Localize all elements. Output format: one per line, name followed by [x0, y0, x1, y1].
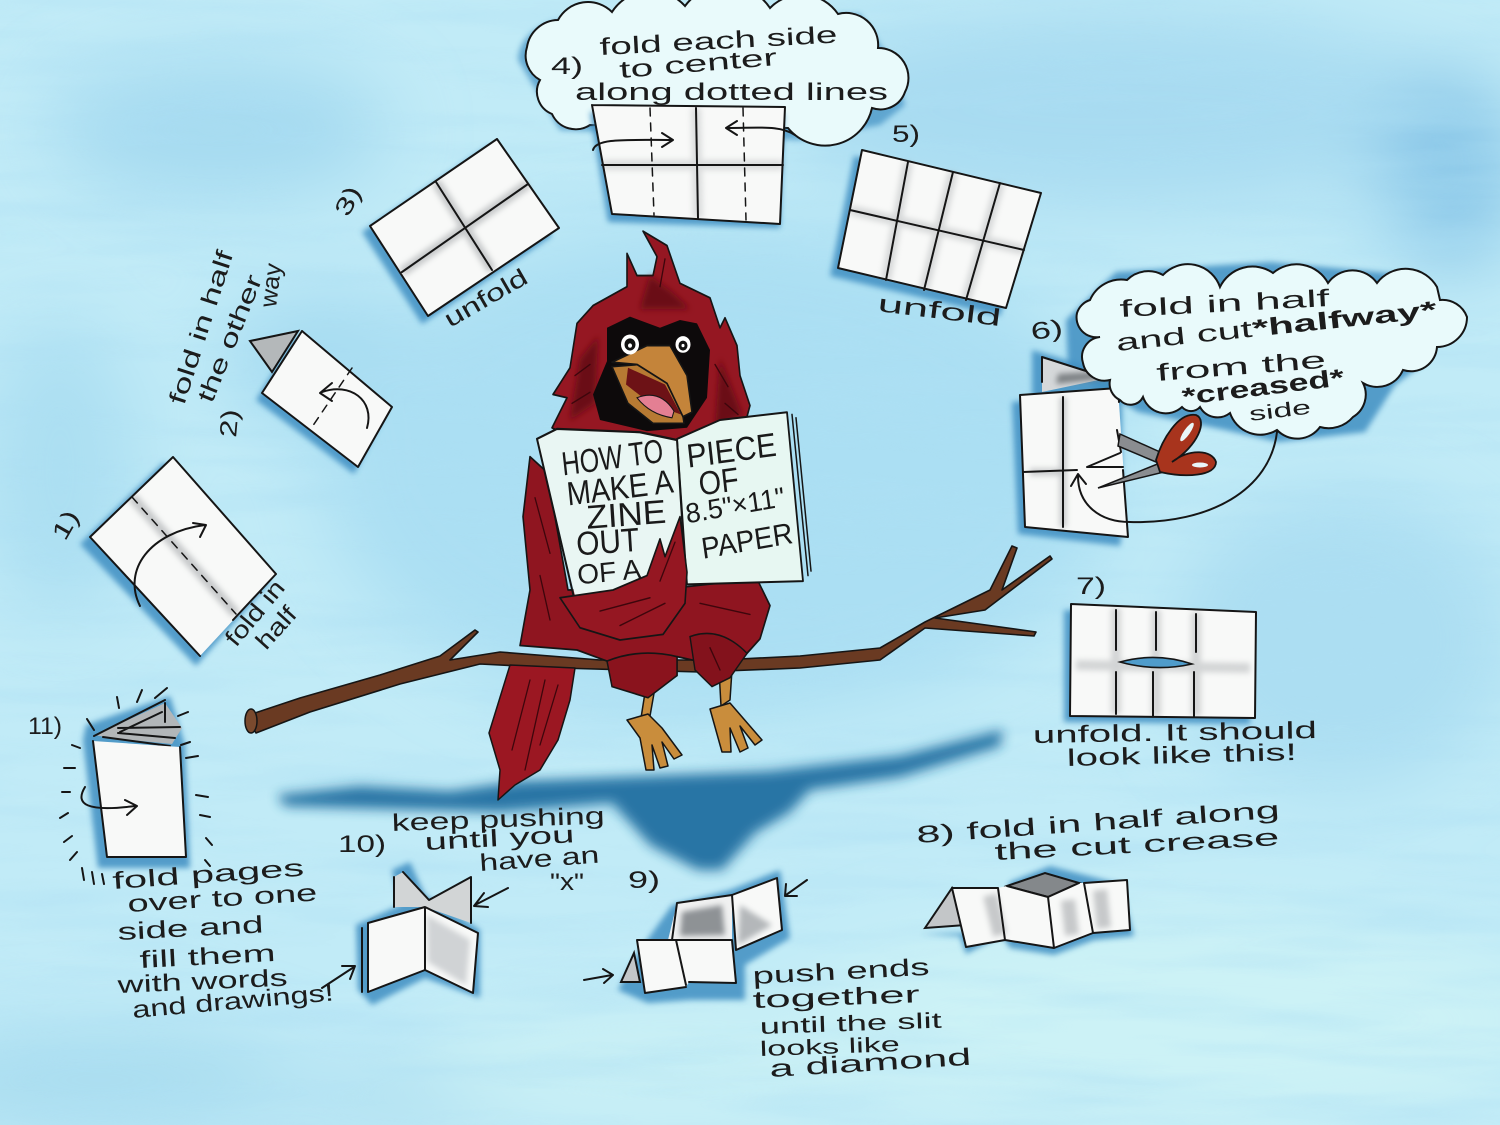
caption: fold each side to center: fold each side	[599, 22, 838, 61]
book text: ZINE	[585, 492, 667, 536]
number 6: 6)	[1029, 315, 1065, 346]
paper 10	[368, 907, 478, 993]
caption: fold each side to center: to center	[618, 44, 778, 84]
right page	[677, 412, 803, 584]
cloud 6	[1077, 264, 1467, 439]
caption: fold each side to center	[575, 22, 888, 106]
arrow: cut location	[1071, 432, 1277, 522]
diamond opening	[1007, 873, 1079, 897]
cloud 4	[526, 0, 908, 146]
left page	[537, 429, 686, 600]
front wing holding book	[560, 517, 687, 640]
number 5: 5)	[892, 121, 920, 148]
slit	[1120, 657, 1192, 668]
motion ticks	[60, 688, 212, 884]
caption: fold pages over to one side and fill them with words and drawings: side and	[117, 911, 264, 946]
caption: fold in half and cut halfway from the creased side: and cut *halfway*	[1115, 296, 1439, 357]
step 10: keep pushing until you have an x	[322, 803, 605, 1005]
step 3: unfold	[329, 139, 559, 333]
step 5: unfold	[830, 121, 1041, 332]
step 11: fold pages and fill them	[28, 688, 335, 1024]
caption: fold pages over to one side and fill them with words and drawings: with words	[116, 965, 288, 999]
book text: OF A	[576, 553, 643, 591]
paper 2	[262, 331, 392, 467]
back panels	[668, 895, 732, 940]
caption: 8) fold in half along the cut crease	[916, 797, 1281, 866]
paper 6	[1020, 388, 1128, 537]
cardinal mascot	[489, 231, 811, 800]
caption: fold in half the other way	[164, 247, 287, 408]
caption: fold pages over to one side and fill them with words and drawings	[112, 855, 335, 1024]
paper 3	[370, 139, 559, 316]
number 10: 10)	[338, 831, 386, 858]
caption: 8) fold in half along the cut crease: 8) fold in half along	[916, 797, 1281, 849]
caption: fold in half and cut halfway from the creased side: side	[1248, 397, 1312, 426]
caption: fold pages over to one side and fill them with words and drawings: and drawings!	[131, 979, 335, 1024]
feather detail strokes	[535, 259, 750, 670]
number 4: 4)	[551, 53, 583, 80]
caption: fold in half: fold in	[220, 575, 291, 652]
caption: fold in half and cut halfway from the creased side: *creased*	[1180, 364, 1346, 411]
caption: push ends together until the slit looks like a diamond: together	[752, 981, 920, 1014]
body	[520, 457, 770, 690]
step 9: push ends together	[584, 867, 972, 1083]
caption: push ends together until the slit looks like a diamond: a diamond	[769, 1044, 972, 1083]
caption: fold pages over to one side and fill them with words and drawings: fold pages	[112, 855, 305, 895]
caption: keep pushing until you have an x: "x"	[550, 869, 584, 896]
thigh	[607, 653, 677, 698]
book text: MAKE A	[565, 462, 676, 513]
tail feathers	[489, 665, 575, 800]
paper 2 flap	[250, 331, 298, 372]
book text: PAPER	[699, 517, 795, 566]
book text: HOW TO	[560, 431, 665, 483]
icon: scissors	[1098, 415, 1216, 488]
step 7: unfold, slit shown	[1033, 573, 1317, 772]
paper 8	[952, 880, 1130, 948]
caption: unfold, it should look like this: look like this!	[1066, 739, 1297, 772]
paper 1	[90, 457, 276, 656]
paper 11	[93, 741, 186, 857]
x top panels	[394, 872, 471, 923]
mouth	[612, 364, 684, 423]
caption: keep pushing until you have an x	[391, 803, 605, 896]
paper 8 side flap	[925, 888, 966, 928]
black face mask	[593, 317, 710, 431]
arrows: push ends	[584, 880, 807, 983]
arrow: fold up	[320, 383, 369, 428]
paper 5	[838, 150, 1041, 308]
caption: fold in half the other way: fold in half	[164, 247, 239, 408]
step 6: cloud, scissors, paper	[1012, 262, 1467, 546]
caption: unfold: unfold	[440, 264, 533, 333]
book text: PIECE	[685, 425, 778, 475]
arrow: turn pages	[81, 787, 137, 815]
caption: fold each side to center: along dotted lines	[575, 79, 888, 106]
book text: 8.5"×11"	[683, 481, 787, 530]
arrows: fold to center	[593, 121, 795, 150]
head	[552, 231, 750, 442]
caption: fold in half the other way: way	[255, 262, 287, 310]
caption: fold pages over to one side and fill them with words and drawings: over to one	[127, 879, 318, 918]
tongue	[637, 395, 674, 418]
caption: unfold, it should look like this	[1033, 717, 1317, 772]
caption: fold in half	[220, 575, 303, 655]
caption: unfold, it should look like this: unfold. It should	[1033, 717, 1317, 749]
arrow: fold over	[135, 523, 206, 606]
book text	[560, 425, 795, 591]
book text: OF	[697, 460, 741, 503]
number 2: 2)	[215, 408, 244, 439]
caption: 8) fold in half along the cut crease: the cut crease	[994, 824, 1280, 866]
caption: push ends together until the slit looks like a diamond: push ends	[752, 954, 930, 990]
caption: fold in half the other way: the other	[193, 271, 268, 406]
open book	[537, 412, 811, 600]
eyes	[621, 334, 690, 354]
step 2: fold in half the other way	[164, 247, 392, 474]
caption: keep pushing until you have an x: have an	[479, 842, 600, 877]
number 3: 3)	[329, 182, 367, 221]
caption: keep pushing until you have an x: keep pushing	[391, 803, 605, 837]
branch	[245, 546, 1052, 733]
caption: fold pages over to one side and fill them with words and drawings: fill them	[139, 940, 276, 974]
caption: push ends together until the slit looks like a diamond	[752, 954, 972, 1083]
step 8: fold in half along the cut crease	[916, 797, 1281, 955]
beak	[612, 346, 692, 417]
arrows: pushing	[322, 888, 508, 988]
upper bird, vertically scaled group	[520, 231, 811, 698]
number 11: 11)	[28, 713, 62, 740]
caption: keep pushing until you have an x: until you	[424, 821, 575, 856]
book text: OUT	[575, 520, 640, 563]
page fan	[95, 703, 182, 744]
step 1: fold in half	[47, 457, 303, 666]
branch shadow on the wash	[277, 730, 1003, 870]
step 4: cloud, paper, caption	[518, 0, 908, 228]
paper 7	[1070, 604, 1256, 718]
side flap	[621, 953, 640, 982]
paper 6 flap	[1042, 357, 1108, 392]
caption: fold in half: half	[250, 601, 303, 655]
head shading	[570, 276, 742, 431]
paper 9 front	[637, 940, 736, 993]
caption: unfold: unfold	[876, 290, 1003, 332]
caption: fold in half and cut halfway from the creased side: from the	[1155, 347, 1327, 387]
legs and feet	[627, 670, 762, 770]
number 9: 9)	[628, 867, 660, 894]
caption: push ends together until the slit looks like a diamond: until the slit	[759, 1008, 942, 1039]
caption: fold in half and cut halfway from the creased side: fold in half	[1119, 285, 1331, 323]
paper 4	[592, 105, 785, 224]
number 1: 1)	[47, 506, 85, 545]
caption: fold in half and cut halfway from the creased side	[1115, 285, 1439, 426]
caption: push ends together until the slit looks like a diamond: looks like	[759, 1033, 900, 1061]
number 7: 7)	[1076, 573, 1106, 600]
